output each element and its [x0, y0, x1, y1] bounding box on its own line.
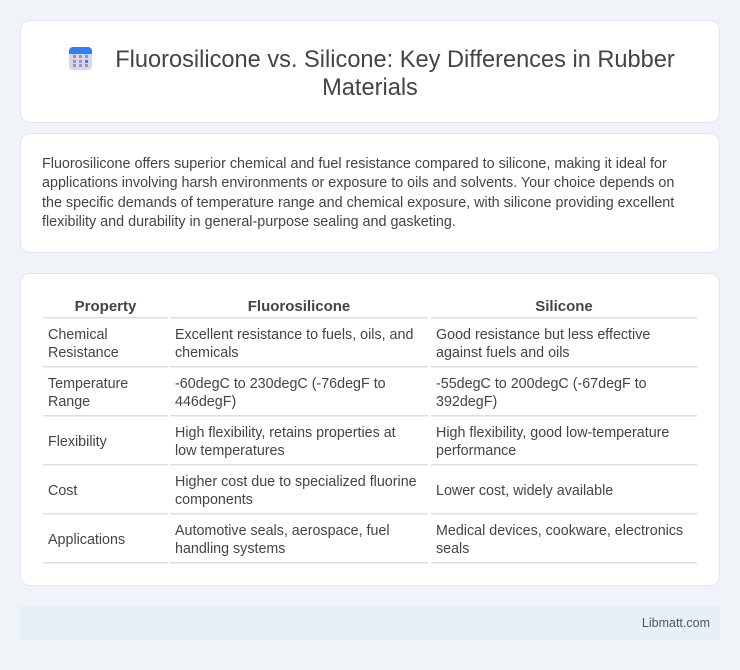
row: applications — [48, 523, 683, 557]
comparison table panel — [20, 273, 720, 586]
intro paragraph — [42, 156, 674, 230]
row: cost — [48, 474, 613, 508]
intro paragraph: Fluorosilicone offers superior chemical and fuel resistance compared to silicone, making it ideal for — [42, 156, 667, 172]
row: chemical resistance: against fuels and oils — [436, 345, 570, 361]
row: flexibility: performance — [436, 443, 516, 459]
row: chemical resistance — [48, 327, 650, 361]
row: flexibility: High flexibility, good low-temperature — [436, 425, 669, 441]
row: chemical resistance: Good resistance but less effective — [436, 327, 650, 343]
row: temperature range: -55degC to 200degC (-67degF to — [436, 376, 647, 392]
icon: calendar — [69, 47, 92, 70]
table header: Property — [75, 298, 136, 315]
row: cost: Cost — [48, 483, 77, 499]
row: chemical resistance: Chemical — [48, 327, 108, 343]
title — [115, 47, 675, 101]
row: cost: Higher cost due to specialized fluorine — [175, 474, 417, 490]
row: applications: Automotive seals, aerospace, fuel — [175, 523, 390, 539]
row: applications: Applications — [48, 532, 125, 548]
table header — [75, 298, 593, 315]
intro text panel — [20, 133, 720, 253]
title card — [20, 20, 720, 123]
row: applications: Medical devices, cookware, electronics — [436, 523, 683, 539]
footer bar — [20, 606, 720, 640]
row: applications: handling systems — [175, 541, 285, 557]
title: Materials — [322, 75, 418, 101]
row: flexibility: Flexibility — [48, 434, 107, 450]
row: applications: seals — [436, 541, 469, 557]
table header: Silicone — [535, 298, 593, 315]
row: chemical resistance: Resistance — [48, 345, 119, 361]
table header: Fluorosilicone — [248, 298, 350, 315]
row: temperature range: Temperature — [48, 376, 128, 392]
intro paragraph: applications involving harsh environments or exposure to oils and solvents. Your choice depends on — [42, 175, 674, 191]
row: chemical resistance: chemicals — [175, 345, 239, 361]
row: cost: Lower cost, widely available — [436, 483, 613, 499]
row: temperature range: Range — [48, 394, 90, 410]
row: temperature range — [48, 376, 647, 410]
row: chemical resistance: Excellent resistance to fuels, oils, and — [175, 327, 413, 343]
row: temperature range: -60degC to 230degC (-76degF to — [175, 376, 386, 392]
row: flexibility: High flexibility, retains properties at — [175, 425, 396, 441]
row: temperature range: 446degF) — [175, 394, 236, 410]
row: cost: components — [175, 492, 253, 508]
footer text: Libmatt.com — [642, 616, 710, 630]
intro paragraph: flexibility and durability in general-purpose sealing and gasketing. — [42, 214, 456, 230]
title: Fluorosilicone vs. Silicone: Key Differences in Rubber — [115, 47, 675, 73]
row: flexibility: low temperatures — [175, 443, 285, 459]
intro paragraph: the specific demands of temperature range and chemical exposure, with silicone providing excellent — [42, 195, 674, 211]
row: temperature range: 392degF) — [436, 394, 497, 410]
row: flexibility — [48, 425, 669, 459]
